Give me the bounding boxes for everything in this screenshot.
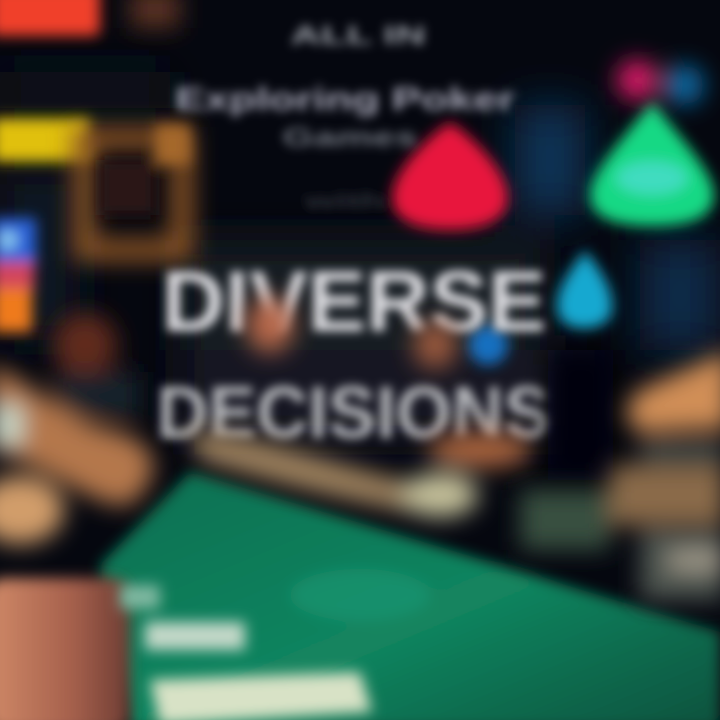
player: right arm [520, 350, 720, 600]
icon: blue chip [468, 325, 508, 365]
heading: Diverse: DIVERSE [162, 254, 546, 350]
panel: green poker table [100, 472, 720, 720]
icon: wooden frame [84, 138, 182, 250]
heading: Decisions: DECISIONS [156, 371, 552, 454]
icon: brown sign top-left [130, 0, 180, 28]
icon: yellow sign [0, 118, 90, 162]
heading: intro text: Exploring Poker [175, 81, 515, 117]
icon: foreground card stack [0, 578, 130, 720]
background glow: blue haze [0, 70, 720, 440]
icon: colourful screen left [0, 218, 36, 332]
player: centre hands [190, 297, 532, 517]
player: dark centre figure [548, 350, 613, 480]
icon: frame highlight [100, 125, 190, 215]
icon: top pink and blue marks [617, 60, 704, 105]
icon: white cards on table [120, 585, 372, 720]
heading: intro text: with [303, 191, 385, 213]
icon: green spade [590, 100, 714, 226]
heading: intro text: Games [282, 122, 418, 152]
icon: cyan spade [557, 250, 612, 329]
icon: red neon sign top-left [0, 0, 100, 36]
icon: red spade [392, 122, 508, 230]
player: left man [0, 313, 153, 544]
heading: intro text [175, 81, 515, 213]
players: seated figures around the table [0, 297, 720, 600]
title: top small text: ALL IN [290, 20, 426, 50]
